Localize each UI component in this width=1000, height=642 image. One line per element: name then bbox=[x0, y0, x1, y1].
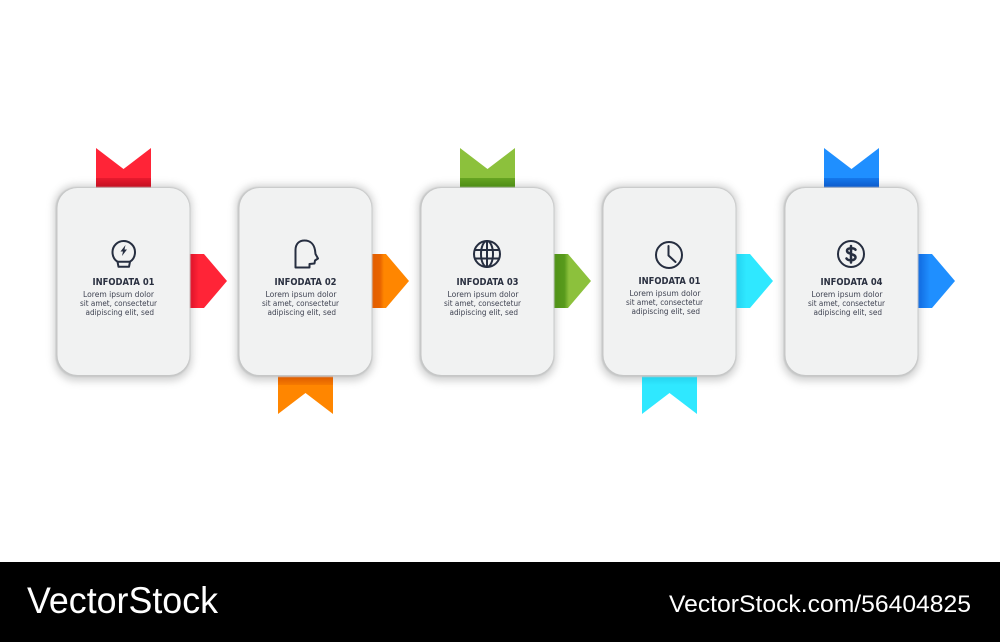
text block: Lorem ipsum dolor bbox=[812, 290, 883, 299]
text block: adipiscing elit, sed bbox=[632, 307, 700, 316]
step 1: red card bbox=[54, 148, 227, 381]
icon: head profile bbox=[296, 240, 318, 268]
icon: light bulb bbox=[112, 241, 135, 267]
text block bbox=[626, 289, 704, 316]
arrow: blue bbox=[917, 254, 955, 308]
heading: INFODATA 01 bbox=[92, 277, 155, 288]
step 2: orange card bbox=[236, 185, 409, 414]
heading: INFODATA 04 bbox=[820, 277, 883, 288]
step 5: blue card bbox=[782, 148, 955, 381]
card edge bbox=[238, 187, 372, 377]
text block: adipiscing elit, sed bbox=[86, 308, 154, 317]
ribbon: blue top bbox=[824, 148, 879, 188]
ribbon: red top bbox=[96, 148, 151, 188]
text block: sit amet, consectetur bbox=[80, 299, 158, 308]
footer logo text: VectorStock bbox=[27, 580, 218, 621]
heading: INFODATA 02 bbox=[274, 277, 337, 288]
text block: sit amet, consectetur bbox=[626, 298, 704, 307]
heading: INFODATA 03 bbox=[456, 277, 519, 288]
card edge bbox=[56, 187, 190, 377]
text block bbox=[444, 290, 522, 317]
ribbon: orange bottom bbox=[278, 375, 333, 414]
card shadow bbox=[418, 185, 556, 381]
text block: sit amet, consectetur bbox=[808, 299, 886, 308]
card panel bbox=[786, 188, 918, 375]
arrow: cyan bbox=[735, 254, 773, 308]
card shadow bbox=[782, 185, 920, 381]
text block: Lorem ipsum dolor bbox=[266, 290, 337, 299]
card panel bbox=[240, 188, 372, 375]
text block: adipiscing elit, sed bbox=[814, 308, 882, 317]
card edge bbox=[784, 187, 918, 377]
text block: adipiscing elit, sed bbox=[268, 308, 336, 317]
ribbon: cyan bottom bbox=[642, 375, 697, 414]
arrow: green bbox=[553, 254, 591, 308]
text block bbox=[262, 290, 340, 317]
text block bbox=[80, 290, 158, 317]
card panel bbox=[604, 188, 736, 375]
icon: globe bbox=[474, 241, 500, 267]
card shadow bbox=[600, 185, 738, 381]
arrow: red bbox=[189, 254, 227, 308]
arrow: orange bbox=[371, 254, 409, 308]
step 4: cyan card bbox=[600, 185, 773, 414]
icon: clock bbox=[656, 242, 682, 268]
ribbon: green top bbox=[460, 148, 515, 188]
card panel bbox=[422, 188, 554, 375]
card shadow bbox=[236, 185, 374, 381]
icon: bolt bbox=[120, 245, 127, 256]
card edge bbox=[602, 187, 736, 377]
text block: adipiscing elit, sed bbox=[450, 308, 518, 317]
heading: INFODATA 01 bbox=[638, 276, 701, 287]
text block: Lorem ipsum dolor bbox=[83, 290, 155, 299]
footer url text: VectorStock.com/56404825 bbox=[669, 591, 971, 618]
card panel bbox=[58, 188, 190, 375]
footer bar bbox=[0, 562, 1000, 642]
text block: Lorem ipsum dolor bbox=[448, 290, 519, 299]
text block: sit amet, consectetur bbox=[262, 299, 340, 308]
card shadow bbox=[54, 185, 192, 381]
step 3: green card bbox=[418, 148, 591, 381]
text block bbox=[808, 290, 886, 317]
text block: Lorem ipsum dolor bbox=[630, 289, 701, 298]
card edge bbox=[420, 187, 554, 377]
text block: sit amet, consectetur bbox=[444, 299, 522, 308]
icon: dollar coin bbox=[838, 241, 864, 267]
